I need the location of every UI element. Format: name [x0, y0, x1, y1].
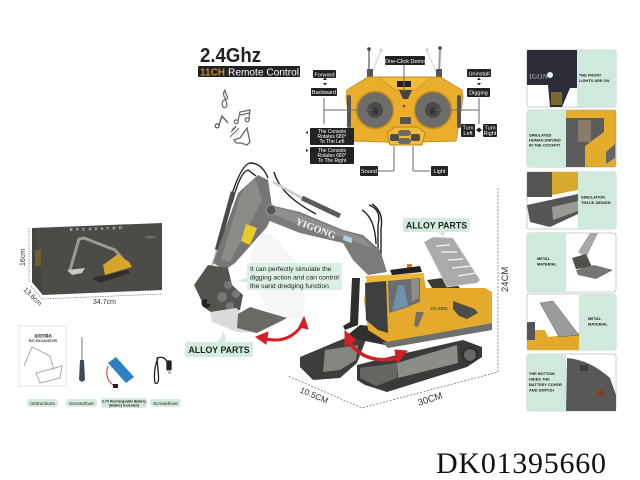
dimension labels	[299, 267, 511, 409]
excavator ghost arm	[250, 232, 305, 318]
feature panel: metal bucket: MATERIAL	[537, 262, 557, 266]
boom brand text: YIGONG	[294, 217, 337, 242]
feature panel: metal hood	[527, 294, 616, 350]
joysticks	[356, 92, 394, 128]
accessory labels: Screwdriver	[69, 401, 95, 407]
feature panel: battery cover: AND SWITCH	[529, 388, 554, 392]
callout: alloy parts (bucket): ALLOY PARTS	[188, 345, 250, 355]
remote controller	[346, 46, 463, 145]
cab and engine body	[364, 273, 492, 342]
box dimension labels	[20, 249, 116, 308]
bucket linkage	[194, 265, 243, 315]
arm	[213, 175, 273, 270]
accessory: instructions sheet: R/C EXCAVATOR	[29, 339, 58, 343]
feature panel: battery cover: HIDES THE	[529, 376, 550, 382]
accessory labels: (Battery Included)	[109, 404, 139, 408]
product box: 2.4GHz	[145, 235, 156, 239]
remote labels: Rotates 680°	[318, 153, 346, 159]
feature panel: track design	[527, 172, 616, 229]
remote labels	[306, 56, 497, 176]
remote labels: Turn	[484, 126, 496, 132]
feature panel: metal bucket	[527, 233, 616, 292]
beacon	[407, 264, 412, 270]
feature panel: battery cover	[527, 354, 616, 411]
accessory: screwdriver	[79, 337, 85, 382]
box dimension labels: 16cm	[20, 249, 27, 266]
red rotation arrow: body	[345, 331, 407, 363]
boom	[267, 205, 387, 275]
warning sticker	[241, 224, 257, 245]
icon: music notes and speaker	[215, 90, 250, 145]
remote labels: Left	[463, 131, 473, 137]
front track	[357, 340, 482, 392]
feature panel: human driving: HUMAN DRIVING	[529, 138, 561, 142]
title: 2.4Ghz remote control	[198, 45, 300, 78]
remote labels: Rotates 680°	[318, 134, 346, 140]
buttons	[400, 117, 411, 124]
cab lower shadow	[345, 325, 420, 345]
cab windows	[365, 281, 388, 333]
feature panel: metal hood: MATERIAL	[588, 322, 608, 326]
remote labels: The Console	[318, 129, 346, 135]
box dimension labels: 13.6cm	[22, 286, 43, 308]
boom cylinder	[273, 182, 340, 216]
title: 2.4Ghz remote control: 2.4Ghz	[200, 45, 261, 67]
dimension labels: 24CM	[500, 267, 511, 292]
dimension lines	[288, 188, 498, 408]
remote labels: Light	[434, 169, 446, 175]
callout: digging function: digging action and can control	[250, 274, 339, 282]
remote labels: To The Left	[320, 139, 345, 145]
remote labels: Sound	[361, 169, 377, 175]
remote labels: Uninstall	[468, 72, 490, 78]
product box	[32, 223, 162, 295]
callout: digging function: It can perfectly simulate the	[250, 266, 332, 273]
accessory labels: Screwdriver	[153, 401, 179, 407]
remote labels: The Console	[318, 148, 346, 154]
boom cylinder to cab	[343, 278, 360, 330]
dimension labels: 10.5CM	[299, 385, 330, 406]
callout: digging function	[238, 263, 342, 290]
feature panel: front lights	[527, 50, 616, 107]
feature panel: front lights: THE FRONT	[579, 72, 602, 78]
feature panel: metal bucket: METAL	[537, 256, 551, 261]
feature panel: human driving: SIMULATED	[529, 132, 552, 138]
callout: digging function: the sand dredging function	[250, 283, 329, 290]
accessory: battery	[107, 357, 134, 388]
title: 2.4Ghz remote control: 11CH	[200, 68, 225, 78]
antennas	[367, 46, 442, 78]
accessory: instructions sheet: 遥控挖掘机	[34, 333, 52, 338]
raised hood	[427, 277, 460, 288]
title: 2.4Ghz remote control: Remote Control	[228, 68, 299, 78]
remote callout lines	[324, 60, 479, 171]
accessory: USB cable	[154, 357, 171, 383]
remote labels: To The Right	[318, 158, 347, 164]
feature panel: metal hood: METAL	[588, 316, 602, 321]
excavator	[194, 163, 492, 392]
feature panel: battery cover: BATTERY COVER	[529, 382, 562, 387]
dimension labels: 30CM	[416, 390, 444, 409]
box excavator image	[67, 238, 132, 283]
accessory labels	[27, 398, 181, 408]
accessory labels: 3.7V Rechargeable Battery	[102, 400, 146, 404]
bucket cylinder	[206, 192, 233, 285]
callout: alloy parts (hood): ALLOY PARTS	[406, 220, 467, 230]
callout: alloy parts (bucket)	[185, 331, 253, 357]
feature panel: track design: SIMULATION	[581, 194, 605, 200]
remote labels: Backward	[312, 90, 336, 96]
callout: alloy parts (hood)	[403, 218, 470, 237]
product box: EXCAVATOR	[70, 225, 122, 232]
box dimension labels: 34.7cm	[93, 299, 116, 306]
feature panel: human driving	[527, 110, 616, 167]
accessory: instructions sheet	[19, 326, 66, 386]
box dimension lines	[29, 228, 162, 299]
bucket	[210, 307, 288, 333]
remote labels: One-Click Demo	[385, 59, 425, 65]
rear track	[300, 337, 367, 380]
remote labels: Right	[484, 131, 497, 137]
engine vent	[453, 301, 478, 319]
remote labels: Forward	[314, 72, 335, 78]
hydraulic hoses	[228, 163, 382, 268]
controller body	[346, 77, 463, 145]
feature panel: track design: TRACK DESIGN	[581, 200, 611, 205]
remote labels: Digging	[469, 90, 488, 96]
remote labels: Turn	[462, 126, 474, 132]
feature panel: human driving: IN THE COCKPIT	[529, 142, 561, 148]
product code: DK01395660	[436, 447, 606, 480]
red rotation arrow: bucket	[256, 317, 308, 344]
excavator: YG-2BIC	[430, 306, 449, 311]
accessory labels: Instructions	[30, 401, 55, 407]
feature panel: front lights: IGON	[529, 73, 548, 81]
feature panel: front lights: LIGHTS ARE ON	[579, 78, 610, 83]
boom light	[343, 235, 352, 243]
feature panel: battery cover: THE BOTTOM	[529, 371, 555, 376]
